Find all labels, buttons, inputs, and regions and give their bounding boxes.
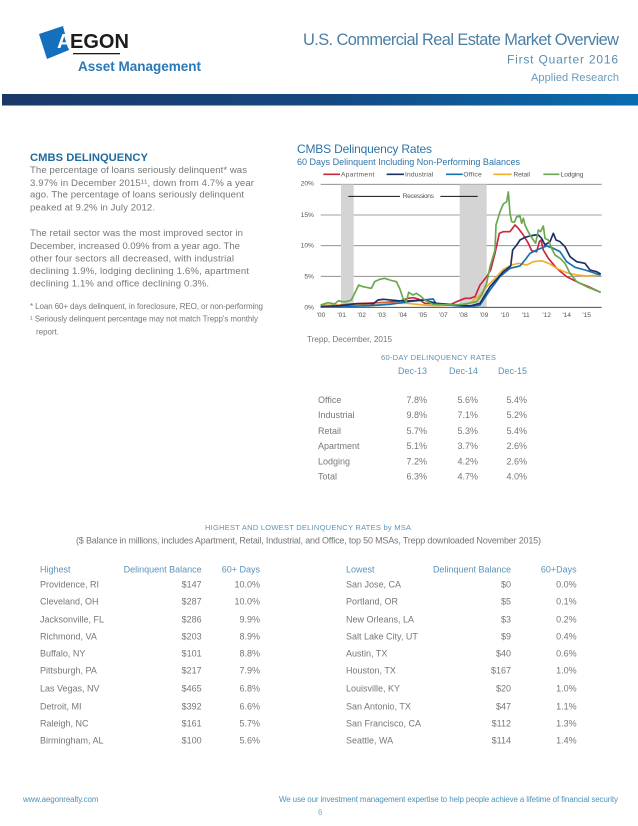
website: www.aegonrealty.com (22, 795, 99, 804)
rows: 5.6% (457, 395, 478, 405)
x-axis labels: '03 (377, 312, 386, 319)
rows: 8.8% (239, 648, 260, 658)
section subtitle: ($ Balance in millions, includes Apartment, Retail, Industrial, and Office, top 50 MSAs, Trepp downloaded November 2015) (76, 536, 541, 546)
x-axis labels: '10 (501, 312, 510, 319)
x-axis labels: '04 (398, 312, 407, 319)
rows: Austin, TX (346, 648, 387, 658)
logo: Aegon Asset Management: EGON (70, 31, 129, 53)
x-axis labels: '07 (439, 312, 448, 319)
rows: Salt Lake City, UT (346, 632, 418, 642)
rows: $9 (501, 632, 511, 642)
x-axis labels: '08 (459, 312, 468, 319)
icon: blue tilted square (39, 26, 69, 59)
rows: 9.9% (239, 614, 260, 624)
rows: $217 (182, 666, 202, 676)
x-axis labels (317, 312, 591, 319)
series: retail (321, 261, 601, 306)
rows: 1.4% (556, 736, 577, 746)
x-axis labels: '09 (480, 312, 489, 319)
paragraph 1: peaked at 9.2% in July 2012. (30, 202, 155, 214)
logo subtitle: Asset Management (78, 59, 202, 74)
rows: $203 (182, 632, 202, 642)
rows: Houston, TX (346, 666, 396, 676)
paragraph 2: other four sectors all decreased, with industrial (30, 254, 234, 264)
rows: 10.0% (234, 580, 260, 590)
rows: $3 (501, 614, 511, 624)
rows: Cleveland, OH (40, 596, 99, 606)
rows: 1.0% (556, 666, 577, 676)
rows: Buffalo, NY (40, 648, 85, 658)
rows: $286 (182, 614, 202, 624)
header bar (2, 94, 638, 106)
panel: CMBS delinquency text (30, 152, 263, 336)
rows: 1.3% (556, 718, 577, 728)
rows: $112 (492, 718, 511, 728)
rows: San Francisco, CA (346, 718, 421, 728)
rows: 7.9% (239, 666, 260, 676)
column headers: Dec-13 (398, 366, 427, 376)
chart title: CMBS Delinquency Rates (297, 142, 432, 156)
rows: Raleigh, NC (40, 718, 89, 728)
column headers: Lowest (346, 564, 375, 574)
rows: Jacksonville, FL (40, 614, 104, 624)
rows: 8.9% (239, 632, 260, 642)
rows (40, 580, 260, 746)
rows: 5.2% (506, 410, 527, 420)
rows: San Antonio, TX (346, 702, 411, 712)
rows: 6.3% (406, 472, 427, 482)
column headers (346, 564, 577, 574)
rows: Richmond, VA (40, 632, 97, 642)
rows: Louisville, KY (346, 684, 400, 694)
paragraph 1: ago. The percentage of loans seriously delinquent (30, 190, 244, 200)
rows: 4.2% (457, 456, 478, 466)
y-axis labels: 5% (304, 274, 314, 281)
rows: $465 (182, 684, 202, 694)
department: Applied Research (531, 72, 619, 84)
rows: Apartment (318, 441, 360, 451)
rows: 1.1% (556, 702, 577, 712)
title: U.S. Commercial Real Estate Market Overview (303, 31, 619, 49)
rows: 9.8% (406, 410, 427, 420)
MSA section heading (76, 523, 541, 546)
rows: 1.0% (556, 684, 577, 694)
series: office (321, 246, 601, 307)
x-axis labels: '14 (562, 312, 571, 319)
legend (323, 172, 584, 179)
column headers: Highest (40, 564, 71, 574)
x-axis labels: '15 (582, 312, 591, 319)
x-axis labels: '00 (317, 312, 326, 319)
rows: Seattle, WA (346, 736, 393, 746)
section title: HIGHEST AND LOWEST DELINQUENCY RATES by MSA (205, 523, 411, 532)
series: lodging (321, 192, 601, 305)
rows: 4.0% (506, 472, 527, 482)
rows: Portland, OR (346, 596, 399, 606)
rows: 0.2% (556, 614, 577, 624)
rows: Detroit, MI (40, 702, 82, 712)
paragraph 2: declining 1.9%, lodging declining 1.6%, apartment (30, 266, 249, 277)
column headers: Delinquent Balance (433, 564, 511, 574)
legend: Lodging (561, 172, 584, 179)
rows: 10.0% (234, 596, 260, 606)
report header (303, 31, 619, 84)
rows: Total (318, 472, 337, 482)
rows: San Jose, CA (346, 580, 401, 590)
rows: Retail (318, 426, 341, 436)
page number: 6 (318, 808, 323, 817)
footnotes: report. (36, 328, 59, 336)
rows: Pittsburgh, PA (40, 666, 97, 676)
rows: 5.7% (406, 426, 427, 436)
x-axis labels: '05 (418, 312, 427, 319)
table: lowest delinquency by MSA (346, 564, 577, 746)
rows: Office (318, 395, 341, 405)
column headers: 60+ Days (222, 564, 260, 574)
rows (318, 395, 527, 482)
line chart: CMBS delinquency rates (301, 172, 602, 319)
rows: Las Vegas, NV (40, 684, 100, 694)
x-axis labels: '12 (542, 312, 551, 319)
rows: Industrial (318, 410, 355, 420)
paragraph 2 (30, 228, 249, 290)
rows: $167 (491, 666, 511, 676)
rows: New Orleans, LA (346, 614, 414, 624)
rows: Providence, RI (40, 580, 99, 590)
rows: 0.1% (556, 596, 577, 606)
rows: $147 (182, 580, 202, 590)
column headers: 60+Days (541, 564, 577, 574)
rows: 0.0% (556, 580, 577, 590)
logo: Aegon Asset Management (39, 26, 202, 74)
rows: 0.4% (556, 632, 577, 642)
tagline: We use our investment management expertise to help people achieve a lifetime of financial security (279, 795, 618, 804)
rows: $114 (492, 736, 511, 746)
rows: 5.1% (406, 441, 427, 451)
table: highest delinquency by MSA (40, 564, 260, 746)
chart source: Trepp, December, 2015 (307, 335, 392, 344)
x-axis labels: '11 (522, 312, 530, 319)
rows: 3.7% (457, 441, 478, 451)
recessions annotation (348, 193, 478, 200)
table: 60-day delinquency rates (318, 353, 527, 482)
rows: 5.4% (506, 395, 527, 405)
paragraph 1: 3.97% in December 2015¹¹, down from 4.7% a year (30, 178, 255, 189)
paragraph 2: The retail sector was the most improved sector in (30, 228, 243, 239)
column headers (398, 366, 527, 376)
rows: $20 (496, 684, 511, 694)
rows: 5.3% (457, 426, 478, 436)
rows: $161 (182, 718, 202, 728)
rows: 7.2% (406, 456, 427, 466)
column headers: Dec-15 (498, 366, 527, 376)
legend: Apartment (341, 172, 374, 179)
column headers: Delinquent Balance (124, 564, 202, 574)
logo wordmark: A (57, 31, 71, 53)
quarter: First Quarter 2016 (507, 52, 618, 66)
y-axis labels: 10% (301, 243, 314, 250)
paragraph 2: declining 1.1% and office declining 0.3%. (30, 278, 209, 290)
rows: Lodging (318, 456, 350, 466)
y-axis labels: 15% (301, 212, 314, 219)
rows: 5.4% (506, 426, 527, 436)
rows: 6.6% (239, 702, 260, 712)
column headers (40, 564, 260, 574)
rows: $100 (182, 736, 202, 746)
paragraph 2: December, increased 0.09% from a year ago. The (30, 241, 240, 252)
paragraph 1 (30, 165, 255, 214)
rows: 2.6% (506, 456, 527, 466)
footnotes: ¹ Seriously delinquent percentage may not match Trepp's monthly (30, 314, 258, 324)
rows: 7.1% (457, 410, 478, 420)
rows: 5.7% (239, 718, 260, 728)
y-axis labels: 20% (301, 181, 314, 188)
rows: $101 (182, 648, 202, 658)
series: industrial (321, 233, 601, 307)
table title: 60-DAY DELINQUENCY RATES (381, 353, 496, 362)
column headers: Dec-14 (449, 366, 478, 376)
rows: $0 (501, 580, 511, 590)
y-axis labels (301, 181, 314, 312)
heading: CMBS DELINQUENCY (30, 152, 149, 164)
footnotes: * Loan 60+ days delinquent, in foreclosure, REO, or non-performing (30, 302, 263, 311)
footnotes (30, 302, 263, 336)
legend: Retail (513, 172, 531, 179)
rows: 0.6% (556, 648, 577, 658)
rows (346, 580, 577, 746)
rows: 5.6% (239, 736, 260, 746)
recession bands (341, 184, 487, 307)
rows: $5 (501, 596, 511, 606)
rows: $287 (182, 596, 202, 606)
rows: $47 (496, 702, 511, 712)
rows: Birmingham, AL (40, 736, 104, 746)
x-axis labels: '01 (337, 312, 346, 319)
x-axis labels: '02 (357, 312, 366, 319)
paragraph 1: The percentage of loans seriously delinquent* was (30, 165, 247, 176)
series: apartment (321, 225, 601, 306)
rows: $392 (182, 702, 202, 712)
rows: $40 (496, 648, 511, 658)
footer (22, 795, 618, 817)
rows: 7.8% (406, 395, 427, 405)
y-axis labels: 0% (304, 305, 314, 312)
chart heading (297, 142, 520, 167)
rows: 6.8% (239, 684, 260, 694)
legend: Office (463, 172, 482, 179)
recessions annotation: Recessions (403, 193, 435, 200)
rows: 2.6% (506, 441, 527, 451)
legend: Industrial (405, 172, 434, 179)
chart subtitle: 60 Days Delinquent Including Non-Performing Balances (297, 157, 520, 167)
rows: 4.7% (457, 472, 478, 482)
